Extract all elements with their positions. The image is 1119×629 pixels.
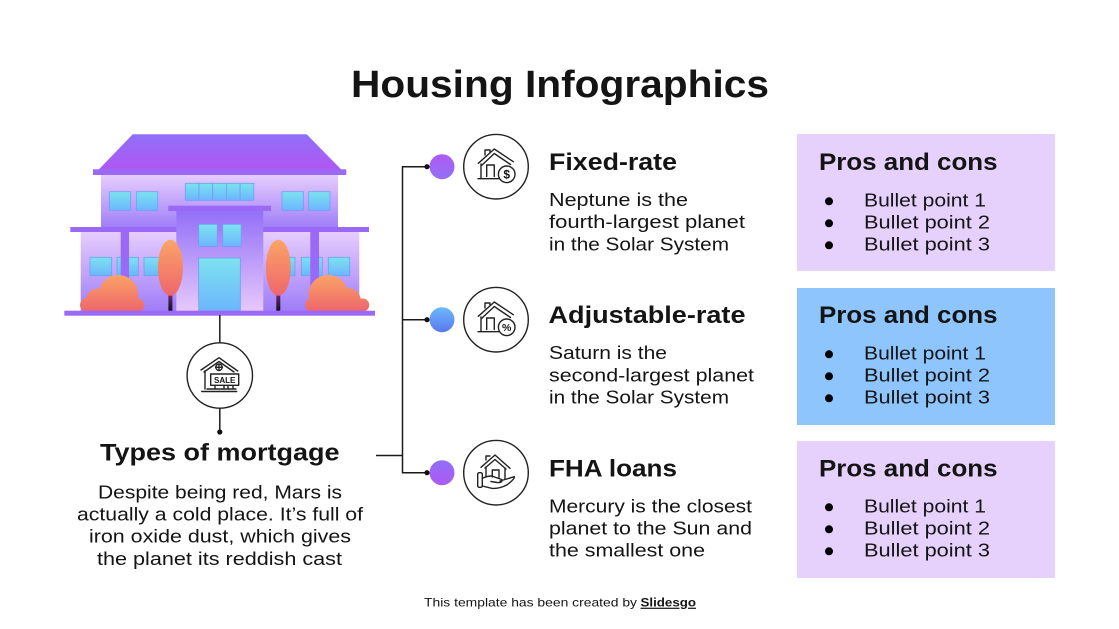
description: Neptune is the (549, 189, 688, 210)
bushes (80, 275, 369, 315)
title: Housing Infographics (351, 64, 769, 106)
trees (158, 240, 291, 311)
text: mars description (77, 481, 364, 569)
porch roof and columns (70, 169, 369, 292)
panel: pros and cons: Bullet point 2 (864, 517, 990, 538)
panel: pros and cons: Pros and cons (819, 456, 998, 482)
description (549, 342, 754, 407)
panel: pros and cons (797, 134, 1055, 271)
footer credit: This template has been created by (424, 596, 637, 610)
description: fourth-largest planet (549, 211, 745, 232)
heading: FHA loans (549, 456, 677, 482)
icon: house for sale (187, 343, 252, 408)
illustration: house (64, 134, 375, 316)
entrance block (168, 206, 271, 311)
icon: house on hand (464, 440, 528, 505)
panel: pros and cons: Bullet point 2 (864, 211, 990, 232)
text: mars description: Despite being red, Mars is (98, 481, 342, 502)
description: the smallest one (549, 540, 705, 561)
house roof (98, 134, 342, 170)
connector: house to mortgage title (217, 315, 222, 435)
description: second-largest planet (549, 364, 754, 385)
heading: Adjustable-rate (548, 302, 746, 329)
description: planet to the Sun and (549, 518, 752, 539)
footer credit: Slidesgo (640, 596, 696, 610)
panel: pros and cons: Bullet point 3 (864, 386, 990, 408)
panel: pros and cons: Bullet point 3 (864, 540, 990, 560)
icon: house with dollar coin: $ (503, 168, 510, 182)
panel: pros and cons: Bullet point 1 (864, 495, 986, 516)
panel: pros and cons: Pros and cons (819, 149, 998, 176)
row: fixed-rate (430, 134, 1055, 271)
text: mars description: the planet its reddish cast (97, 548, 342, 569)
row: adjustable-rate (430, 287, 1055, 425)
icon: house with percent coin: % (502, 322, 512, 334)
description: in the Solar System (549, 386, 729, 407)
icon: house for sale: SALE (214, 376, 236, 385)
marker dot (430, 154, 454, 179)
icon: house with dollar coin (464, 134, 528, 199)
panel: pros and cons: Pros and cons (819, 302, 998, 329)
panel: pros and cons: Bullet point 3 (864, 234, 990, 254)
upper windows (109, 183, 330, 210)
row: FHA loans (430, 440, 1055, 578)
marker dot (430, 307, 454, 332)
description: Saturn is the (549, 342, 667, 363)
description: in the Solar System (549, 233, 729, 254)
panel: pros and cons: Bullet point 1 (864, 189, 986, 210)
heading: types of mortgage: Types of mortgage (100, 440, 340, 467)
footer credit (424, 596, 696, 610)
panel: pros and cons: Bullet point 2 (864, 364, 990, 385)
lower floor wall (81, 232, 359, 311)
description: Mercury is the closest (549, 496, 752, 516)
lower windows (90, 257, 350, 276)
description (549, 189, 745, 254)
panel: pros and cons: Bullet point 1 (864, 342, 986, 363)
description (549, 496, 752, 561)
panel: pros and cons (797, 288, 1055, 425)
heading: Fixed-rate (549, 149, 677, 176)
panel: pros and cons (797, 441, 1055, 578)
marker dot (430, 460, 454, 485)
connector: branching lines (376, 164, 430, 475)
ground base (64, 311, 375, 316)
icon: house with percent coin (464, 287, 528, 352)
text: mars description: iron oxide dust, which gives (89, 526, 351, 547)
text: mars description: actually a cold place. It’s full of (77, 504, 364, 524)
upper floor wall (101, 175, 338, 228)
